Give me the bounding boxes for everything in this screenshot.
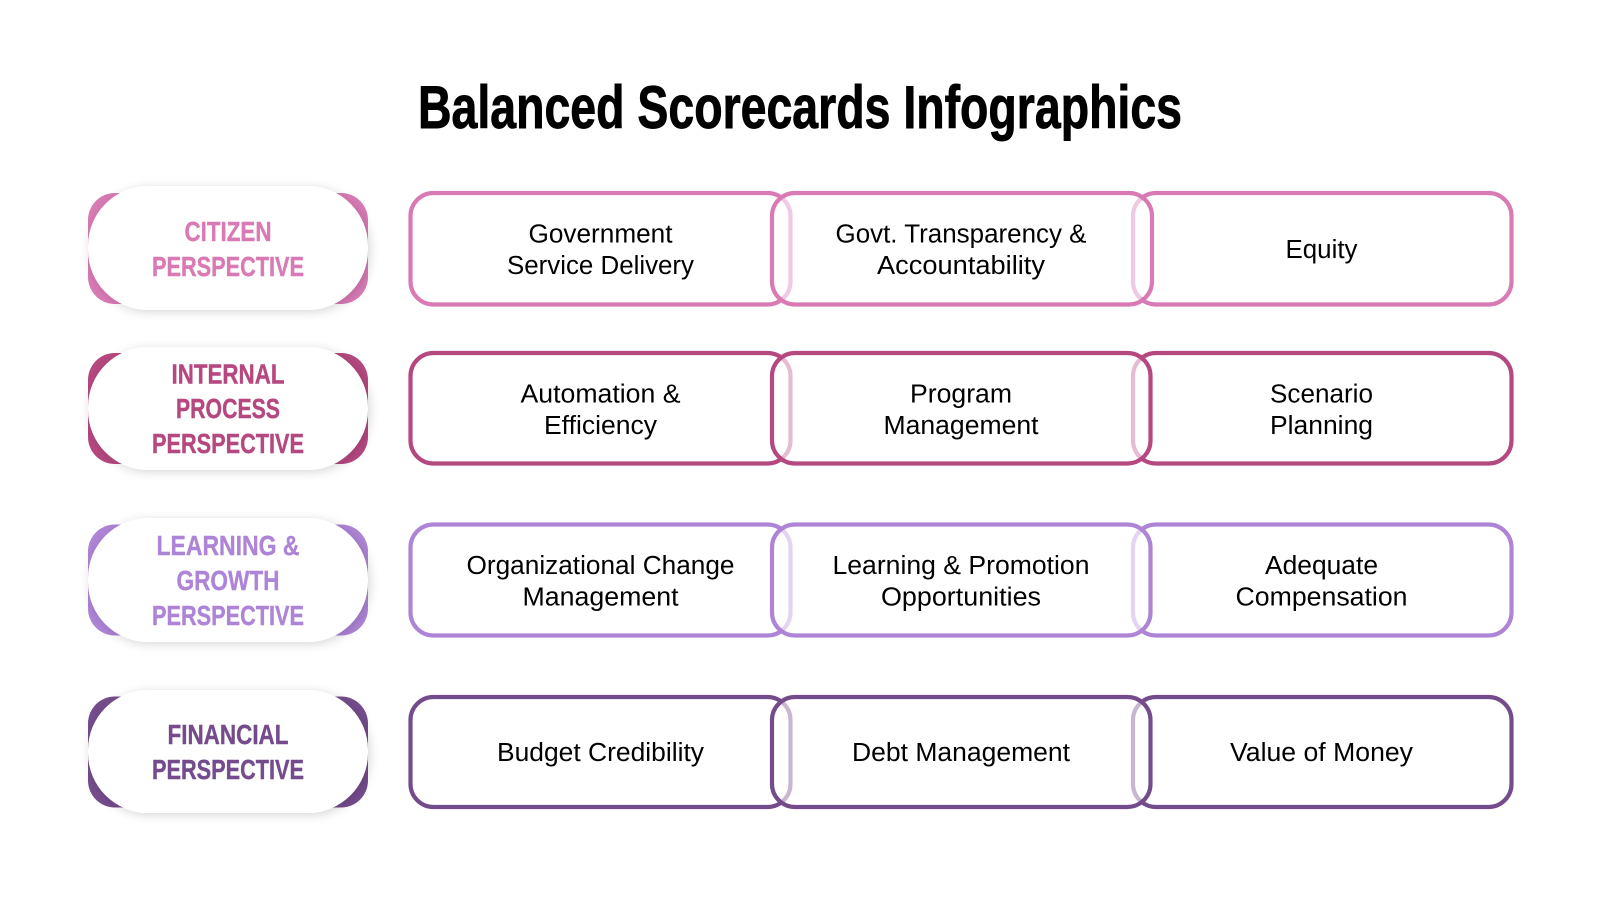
card: organizational change management: Management <box>522 584 678 612</box>
card: government service delivery: Government <box>528 220 672 248</box>
card: program management <box>772 353 1150 464</box>
card: equity <box>1133 193 1512 304</box>
card: scenario planning: Scenario <box>1270 380 1373 408</box>
label pill: financial perspective: PERSPECTIVE <box>152 754 304 785</box>
card: organizational change management: Organizational Change <box>466 552 734 580</box>
card: budget credibility <box>410 697 790 807</box>
card: budget credibility: Budget Credibility <box>497 739 704 767</box>
label pill: learning and growth perspective <box>88 518 368 642</box>
title: Balanced Scorecards Infographics <box>418 74 1182 141</box>
label pill: internal process perspective <box>88 347 368 470</box>
card: automation and efficiency: Efficiency <box>544 412 657 440</box>
card: program management: Management <box>884 412 1038 440</box>
label pill: internal process perspective: PROCESS <box>176 393 280 424</box>
row: internal process perspective <box>88 347 1512 470</box>
card: government service delivery <box>410 193 790 304</box>
card: debt management: Debt Management <box>852 739 1070 767</box>
card: value of money <box>1133 697 1512 807</box>
row: citizen perspective <box>88 186 1512 310</box>
card: learning and promotion opportunities: Opportunities <box>881 584 1041 612</box>
card: automation and efficiency <box>410 353 790 464</box>
card: transparency and accountability: Accountability <box>877 252 1045 280</box>
label pill: financial perspective <box>88 690 368 813</box>
card: scenario planning <box>1133 353 1512 464</box>
card: scenario planning: Planning <box>1270 412 1373 440</box>
card: adequate compensation: Compensation <box>1236 584 1408 612</box>
label pill: citizen perspective: CITIZEN <box>184 216 272 247</box>
label pill: citizen perspective <box>88 186 368 310</box>
card: program management: Program <box>910 380 1012 408</box>
card: learning and promotion opportunities: Learning & Promotion <box>832 552 1090 580</box>
card: equity: Equity <box>1286 236 1358 264</box>
label pill: internal process perspective: PERSPECTIVE <box>152 428 304 459</box>
card: adequate compensation <box>1133 524 1512 636</box>
label pill: learning and growth perspective: GROWTH <box>176 565 280 596</box>
card: learning and promotion opportunities <box>772 524 1150 636</box>
row: financial perspective <box>88 690 1512 813</box>
card: automation and efficiency: Automation & <box>520 380 680 408</box>
card: transparency and accountability: Govt. Transparency & <box>836 220 1086 248</box>
card: debt management <box>772 697 1150 807</box>
row: learning and growth perspective <box>88 518 1512 642</box>
card: value of money: Value of Money <box>1230 739 1413 767</box>
card: government service delivery: Service Delivery <box>507 252 694 280</box>
label pill: learning and growth perspective: LEARNING & <box>156 530 300 561</box>
label pill: learning and growth perspective: PERSPECTIVE <box>152 600 304 631</box>
label pill: financial perspective: FINANCIAL <box>168 719 288 750</box>
card: transparency and accountability <box>772 193 1152 304</box>
label pill: internal process perspective: INTERNAL <box>172 358 284 390</box>
card: adequate compensation: Adequate <box>1265 552 1378 580</box>
card: organizational change management <box>410 524 790 636</box>
label pill: citizen perspective: PERSPECTIVE <box>152 251 304 282</box>
